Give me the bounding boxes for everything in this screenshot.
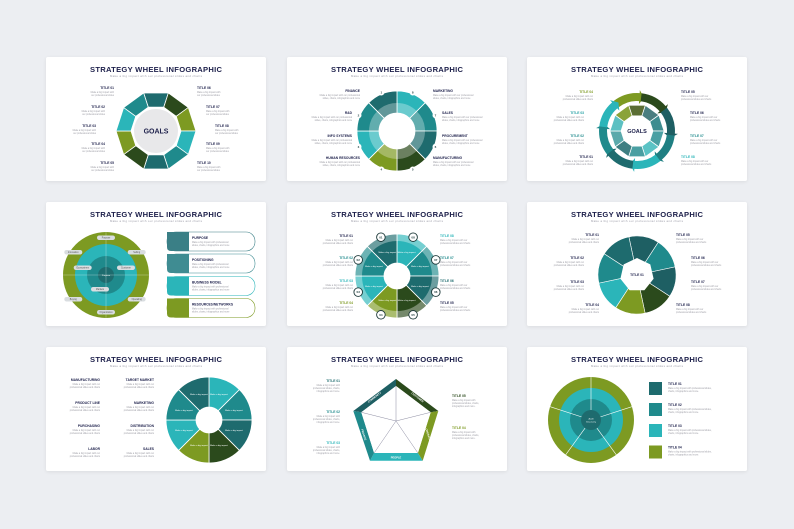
right labels: Make a big impact with <box>197 166 221 169</box>
left labels <box>313 379 341 455</box>
left labels: professional slides and charts <box>554 119 585 122</box>
right labels: professional slides and charts <box>440 287 471 290</box>
chart: concentric wheel <box>63 232 149 318</box>
slide 5: numbered wheel <box>287 202 507 327</box>
right labels: our professional slides <box>215 132 239 135</box>
left labels: our professional slides <box>82 113 106 116</box>
right labels <box>197 86 239 172</box>
chart: gear wheel: 4 <box>380 168 382 172</box>
list: titles: TITLE 02 <box>668 403 682 407</box>
chart: numbered wheel: 02 <box>357 258 360 262</box>
chart: numbered wheel: Make a big impact <box>411 285 429 288</box>
label columns: SALES <box>143 447 155 451</box>
left labels: professional slides and charts <box>569 311 600 314</box>
chart: shutter wheel <box>581 219 693 331</box>
list: titles: charts, infographics and more. <box>668 454 699 456</box>
label columns: professional slides and charts <box>70 386 101 389</box>
label columns: LABOR <box>88 447 101 451</box>
right labels: Make a big impact with our <box>440 284 468 287</box>
left labels: Make a big impact with our <box>566 160 593 163</box>
list: titles: charts, infographics and more. <box>668 432 699 435</box>
label columns: Make a big impact with our <box>127 383 154 386</box>
left labels: TITLE 04 <box>91 142 105 146</box>
chart: numbered wheel: 04 <box>379 313 383 317</box>
right labels: TITLE 05 <box>681 90 695 94</box>
left labels: professional slides and charts <box>323 287 354 290</box>
slide 8: pentagon <box>287 347 507 471</box>
heading: STRATEGY WHEEL INFOGRAPHIC <box>90 355 223 364</box>
right labels: professional slides and charts <box>440 242 471 245</box>
slide 7: business areas wheel <box>46 347 266 472</box>
chart: wheel: Make a big impact <box>175 409 193 412</box>
heading: STRATEGY WHEEL INFOGRAPHIC <box>571 210 704 219</box>
right labels: slides, charts, infographics and more <box>442 119 480 122</box>
right labels: TITLE 07 <box>691 280 705 284</box>
slide 3: goals arrow cycle: Make a big impact with our professional slides and charts <box>591 74 684 78</box>
right labels: Make a big impact with <box>206 147 230 150</box>
left labels: slides, charts, infographics and more <box>323 164 361 167</box>
left labels: TITLE 02 <box>326 410 340 414</box>
right labels: Make a big impact with <box>206 110 230 113</box>
heading: STRATEGY WHEEL INFOGRAPHIC <box>331 210 464 219</box>
right labels: our professional slides <box>206 150 230 153</box>
slide 6: shutter wheel: Make a big impact with our professional slides and charts <box>591 219 684 223</box>
left labels: Make a big impact with our <box>572 308 599 311</box>
slide 4: business model wheel: Make a big impact with our professional slides and charts <box>110 219 203 223</box>
right labels: professional slides and charts <box>690 119 721 122</box>
right labels: Make a big impact with our <box>440 306 468 309</box>
right labels <box>681 90 721 166</box>
left labels: professional slides and charts <box>323 264 354 267</box>
right labels: Make a big impact with our <box>676 308 704 311</box>
chart: numbered wheel: Make a big impact <box>398 299 416 302</box>
chart: numbered wheel: Make a big impact <box>365 285 383 288</box>
right labels: MARKETING <box>433 89 453 93</box>
left labels: professional slides and charts <box>323 242 354 245</box>
left labels: Make a big impact with our <box>326 239 353 242</box>
right labels: Make a big impact with <box>197 91 221 94</box>
list: titles: Make a big impact with professional slides, <box>668 387 712 390</box>
right labels: Make a big impact with our <box>440 239 468 242</box>
list: titles: Make a big impact with professional slides, <box>668 408 712 411</box>
list: purpose/positioning/business model/resources: BUSINESS MODEL <box>192 280 222 284</box>
left labels: professional slides, charts, <box>313 387 340 390</box>
right labels <box>433 89 483 167</box>
label columns: professional slides and charts <box>124 409 155 412</box>
left labels <box>554 233 600 314</box>
heading: STRATEGY WHEEL INFOGRAPHIC <box>90 210 223 219</box>
pentagon side labels: COMMUNITY <box>367 391 382 404</box>
right labels: professional slides and charts <box>676 241 707 244</box>
list: purpose/positioning/business model/resources: RESOURCES/NETWORKS <box>192 302 234 306</box>
heading: STRATEGY WHEEL INFOGRAPHIC <box>90 65 223 74</box>
right labels: TITLE 08 <box>215 124 229 128</box>
list: purpose/positioning/business model/resources: Make a big impact with professional <box>192 241 229 244</box>
chart: gear wheel: 2 <box>358 113 360 117</box>
chart: numbered wheel: 07 <box>434 258 438 262</box>
chart: gear wheel: 1 <box>380 91 382 95</box>
chart: numbered wheel: 08 <box>411 235 415 239</box>
left labels: professional slides, charts, <box>313 449 340 452</box>
left labels: Make a big impact with <box>91 91 115 94</box>
list: purpose/positioning/business model/resources: Make a big impact with professional <box>192 263 229 266</box>
chart: numbered wheel: Make a big impact <box>411 265 429 268</box>
slide 9: audit wheel: Make a big impact with our professional slides and charts <box>591 364 684 368</box>
list: purpose/positioning/business model/resources: slides, charts, infographics and more <box>192 310 230 314</box>
right labels: Make a big impact with our <box>691 261 719 264</box>
chart: concentric audit wheel: Audit <box>588 418 594 420</box>
label columns: professional slides and charts <box>124 432 155 435</box>
chart: numbered wheel <box>346 225 448 327</box>
left labels: our professional slides <box>91 169 115 172</box>
list: purpose/positioning/business model/resources: slides, charts, infographics and more <box>192 288 230 292</box>
right labels: Make a big impact with our <box>681 95 709 98</box>
right labels: TITLE 06 <box>440 279 454 283</box>
left labels: professional slides, charts, <box>313 418 340 421</box>
list: purpose/positioning/business model/resources <box>167 232 255 318</box>
left labels <box>73 86 115 172</box>
chart: concentric audit wheel <box>548 377 634 463</box>
heading: STRATEGY WHEEL INFOGRAPHIC <box>571 65 704 74</box>
slide 9: audit wheel <box>527 347 747 471</box>
chart: gear wheel: 8 <box>412 91 414 95</box>
left labels: infographics and more. <box>317 421 340 424</box>
right labels: professional slides, charts, <box>452 434 479 437</box>
list: titles: Make a big impact with professional slides, <box>668 429 712 432</box>
left labels: TITLE 02 <box>91 105 105 109</box>
right labels: TITLE 06 <box>197 86 211 90</box>
chart: decagon wheel <box>116 93 196 169</box>
left labels: Make a big impact with <box>317 415 341 418</box>
chart: numbered wheel: 03 <box>357 290 360 294</box>
left labels: slides, charts, infographics and more <box>315 119 353 122</box>
slide 5: numbered wheel: Make a big impact with our professional slides and charts <box>351 219 444 223</box>
heading: STRATEGY WHEEL INFOGRAPHIC <box>571 355 704 364</box>
label columns: professional slides and charts <box>70 432 101 435</box>
label columns: professional slides and charts <box>124 455 155 458</box>
left labels: Make a big impact with <box>91 166 115 169</box>
chart: wheel: Make a big impact <box>225 429 243 432</box>
chart: numbered wheel: Make a big impact <box>379 251 397 254</box>
right labels: our professional slides <box>197 94 221 97</box>
list: purpose/positioning/business model/resources: Make a big impact with professional <box>192 308 229 310</box>
label columns: Make a big impact with our <box>73 429 100 432</box>
label columns: PURCHASING <box>78 424 100 428</box>
right labels: MANUFACTURING <box>433 156 463 160</box>
chart: concentric wheel: Buying <box>70 299 78 301</box>
left labels: TITLE 04 <box>339 301 353 305</box>
label columns: Make a big impact with our <box>73 383 100 386</box>
right labels: Make a big impact with our <box>676 238 704 241</box>
chart: wheel: Make a big impact <box>190 393 208 396</box>
left labels: professional slides and charts <box>554 264 585 267</box>
left labels: TITLE 02 <box>339 256 353 260</box>
pentagon side labels: CUSTOMER <box>410 391 425 403</box>
slide 8: pentagon: Make a big impact with our professional slides and charts <box>351 364 444 368</box>
right labels: professional slides and charts <box>440 309 471 312</box>
right labels: Make a big impact with our <box>691 285 719 288</box>
right labels: TITLE 05 <box>440 301 454 305</box>
left labels: Make a big impact with our <box>557 261 584 264</box>
right labels <box>440 234 471 312</box>
list: purpose/positioning/business model/resources: POSITIONING <box>192 258 214 262</box>
right labels: TITLE 06 <box>691 256 705 260</box>
left labels: professional slides and charts <box>563 98 594 101</box>
left labels: our professional slides <box>82 150 106 153</box>
left labels: TITLE 02 <box>570 134 584 138</box>
label columns <box>70 378 155 458</box>
label columns: PRODUCT LINE <box>75 401 101 405</box>
chart: wheel: Make a big impact <box>225 409 243 412</box>
right labels: SALES <box>442 111 454 115</box>
right labels: professional slides and charts <box>676 311 707 314</box>
chart: numbered wheel: 06 <box>434 290 438 294</box>
left labels: professional slides and charts <box>554 288 585 291</box>
chart: pentagon <box>353 379 438 461</box>
label columns: TARGET MARKET <box>126 378 154 382</box>
right labels: Make a big impact with our professional <box>433 94 474 97</box>
list: purpose/positioning/business model/resources: slides, charts, infographics and more <box>192 244 230 247</box>
left labels: Make a big impact with our <box>326 284 353 287</box>
list: titles: charts, infographics and more. <box>668 390 699 393</box>
right labels: Make a big impact with our <box>690 139 718 142</box>
chart: gear wheel: 5 <box>412 168 414 172</box>
right labels: TITLE 08 <box>676 303 690 307</box>
right labels: slides, charts, infographics and more <box>442 142 480 145</box>
chart: wheel: Make a big impact <box>210 393 228 396</box>
right labels: TITLE 07 <box>690 134 704 138</box>
left labels: TITLE 01 <box>100 86 114 90</box>
left labels: Make a big impact with our professional <box>320 94 360 97</box>
left labels: Make a big impact with our <box>557 139 584 142</box>
chart: gear wheel: 3 <box>358 145 360 149</box>
right labels: Make a big impact with our professional <box>433 161 474 164</box>
right labels: TITLE 05 <box>452 394 466 398</box>
left labels: Make a big impact with our <box>326 306 353 309</box>
left labels: Make a big impact with <box>317 446 341 449</box>
chart: concentric wheel: Innovation <box>68 251 79 254</box>
chart: concentric audit wheel: Discovery <box>586 420 597 423</box>
right labels: TITLE 08 <box>440 234 454 238</box>
slide 4: business model wheel <box>46 202 266 326</box>
right labels: TITLE 09 <box>206 142 220 146</box>
chart: gear wheel <box>349 83 445 179</box>
chart: wheel <box>157 368 261 472</box>
left labels <box>554 90 594 166</box>
left labels: TITLE 04 <box>579 90 593 94</box>
chart: concentric wheel: Customer <box>121 267 131 270</box>
pentagon side labels <box>360 391 434 460</box>
list: purpose/positioning/business model/resources: Make a big impact with professional <box>192 286 229 288</box>
chart: wheel: Make a big impact <box>210 444 228 447</box>
slide 1: goals decagon wheel <box>46 57 266 181</box>
chart: shutter wheel: TITLE 01 <box>630 273 644 277</box>
label columns: Make a big impact with our <box>127 406 154 409</box>
chart: numbered wheel: 05 <box>411 313 415 317</box>
chart: wheel: Make a big impact <box>175 429 193 432</box>
left labels: professional slides and charts <box>569 241 600 244</box>
chart: concentric wheel: Markets <box>96 288 105 291</box>
left labels: Make a big impact with <box>317 384 341 387</box>
list: titles: Make a big impact with professional slides, <box>668 450 712 454</box>
right labels: Make a big impact with <box>215 129 239 132</box>
list: purpose/positioning/business model/resources: PURPOSE <box>192 236 209 240</box>
right labels: professional slides and charts <box>440 264 471 267</box>
left labels: slides, charts, infographics and more <box>323 97 361 100</box>
left labels: infographics and more. <box>317 452 340 455</box>
chart: gear wheel: 7 <box>435 113 437 117</box>
right labels: professional slides and charts <box>691 288 722 291</box>
left labels: TITLE 01 <box>579 155 593 159</box>
chart: concentric wheel: Organization <box>99 311 113 314</box>
chart: numbered wheel: Make a big impact <box>365 265 383 268</box>
label columns: Make a big impact with our <box>127 429 154 432</box>
left labels: TITLE 01 <box>585 233 599 237</box>
right labels: professional slides, charts, <box>452 402 479 405</box>
right labels: TITLE 10 <box>197 161 211 165</box>
slide 2: department gear wheel <box>287 57 507 181</box>
left labels: Make a big impact with our professional <box>312 139 352 142</box>
left labels: professional slides and charts <box>563 163 594 166</box>
label columns: professional slides and charts <box>124 386 155 389</box>
right labels: Make a big impact with <box>452 399 476 402</box>
chart: numbered wheel: Make a big impact <box>398 251 416 254</box>
left labels: Make a big impact with our <box>557 285 584 288</box>
right labels: PROCUREMENT <box>442 134 468 138</box>
chart: gear wheel: 6 <box>435 145 437 149</box>
list: titles: charts, infographics and more. <box>668 411 699 414</box>
left labels: Make a big impact with our <box>572 238 599 241</box>
left labels: FINANCE <box>345 89 361 93</box>
left labels: professional slides and charts <box>323 309 354 312</box>
list: titles: TITLE 04 <box>668 446 682 450</box>
slide 3: goals arrow cycle <box>527 57 747 181</box>
right labels: slides, charts, infographics and more <box>433 97 471 100</box>
right labels: Make a big impact with our professional <box>442 139 483 142</box>
left labels: TITLE 03 <box>326 441 340 445</box>
slide 7: business areas wheel: Make a big impact with our professional slides and charts <box>110 364 203 368</box>
right labels: Make a big impact with our professional <box>442 116 483 119</box>
list: titles: TITLE 03 <box>668 424 682 428</box>
chart: decagon wheel: GOALS <box>144 128 169 136</box>
right labels: Make a big impact with our <box>440 261 468 264</box>
chart: concentric wheel: Selling <box>133 252 141 254</box>
slide 2: department gear wheel: Make a big impact with our professional slides and charts <box>351 74 444 78</box>
left labels: Make a big impact with <box>82 147 106 150</box>
right labels: TITLE 07 <box>440 256 454 260</box>
right labels: TITLE 05 <box>676 233 690 237</box>
chart: numbered wheel: 01 <box>379 235 383 239</box>
label columns: Make a big impact with our <box>73 406 100 409</box>
chart: wheel: Make a big impact <box>190 444 208 447</box>
left labels: TITLE 03 <box>339 279 353 283</box>
right labels <box>676 233 722 314</box>
right labels: our professional slides <box>197 169 221 172</box>
label columns: professional slides and charts <box>70 455 101 458</box>
left labels: slides, charts, infographics and more <box>315 142 353 145</box>
right labels: professional slides and charts <box>690 142 721 145</box>
right labels: Make a big impact with our <box>690 116 718 119</box>
label columns: MARKETING <box>134 401 154 405</box>
chart: concentric wheel: Ecosystems <box>77 267 90 270</box>
chart: concentric wheel: Operating <box>132 298 142 301</box>
left labels <box>312 89 361 167</box>
left labels: Make a big impact with <box>82 110 106 113</box>
slide 6: shutter wheel <box>527 202 747 331</box>
pentagon side labels: OPERATIONS <box>424 428 434 446</box>
label columns: Make a big impact with our <box>127 452 154 455</box>
list: purpose/positioning/business model/resources: slides, charts, infographics and more <box>192 266 230 269</box>
heading: STRATEGY WHEEL INFOGRAPHIC <box>331 355 464 364</box>
chart: concentric wheel: Purpose <box>102 274 111 277</box>
right labels: Make a big impact with <box>452 431 476 434</box>
right labels: professional slides and charts <box>691 264 722 267</box>
left labels: Make a big impact with our <box>557 116 584 119</box>
right labels: infographics and more. <box>452 437 476 440</box>
right labels: TITLE 04 <box>452 426 466 430</box>
left labels: TITLE 01 <box>326 379 340 383</box>
left labels: TITLE 04 <box>585 303 599 307</box>
left labels: Make a big impact with our <box>326 261 353 264</box>
label columns: Make a big impact with our <box>73 452 100 455</box>
left labels: TITLE 01 <box>339 234 353 238</box>
label columns: MANUFACTURING <box>71 378 100 382</box>
label columns: professional slides and charts <box>70 409 101 412</box>
left labels: infographics and more. <box>317 390 340 393</box>
left labels: Make a big impact with <box>73 129 97 132</box>
left labels <box>323 234 354 312</box>
right labels: TITLE 08 <box>681 155 695 159</box>
list: titles: TITLE 01 <box>668 382 682 386</box>
right labels: infographics and more. <box>452 405 476 408</box>
pentagon side labels: FINANCE <box>360 429 368 441</box>
chart: concentric wheel: Purpose <box>102 237 111 240</box>
left labels: Make a big impact with our professional <box>312 116 352 119</box>
slide 1: goals decagon wheel: Make a big impact with our professional slides and charts <box>110 74 203 78</box>
right labels: Make a big impact with our <box>681 160 709 163</box>
left labels: TITLE 05 <box>100 161 114 165</box>
right labels: slides, charts, infographics and more <box>433 164 471 167</box>
right labels: professional slides and charts <box>681 163 712 166</box>
pentagon side labels: PEOPLE <box>391 456 402 460</box>
left labels: TITLE 03 <box>570 280 584 284</box>
left labels: R&D <box>345 111 353 115</box>
left labels: TITLE 03 <box>82 124 96 128</box>
left labels: our professional slides <box>91 94 115 97</box>
chart: arrow cycle <box>589 83 685 179</box>
left labels: INFO SYSTEMS <box>327 134 353 138</box>
heading: STRATEGY WHEEL INFOGRAPHIC <box>331 65 464 74</box>
right labels: our professional slides <box>206 113 230 116</box>
left labels: our professional slides <box>73 132 97 135</box>
left labels: professional slides and charts <box>554 142 585 145</box>
left labels: Make a big impact with our <box>566 95 593 98</box>
label columns: DISTRIBUTION <box>131 424 155 428</box>
left labels: TITLE 02 <box>570 256 584 260</box>
left labels: TITLE 03 <box>570 111 584 115</box>
right labels: professional slides and charts <box>681 98 712 101</box>
right labels <box>452 394 479 440</box>
chart: arrow cycle: GOALS <box>627 129 647 135</box>
left labels: HUMAN RESOURCES <box>326 156 361 160</box>
chart: numbered wheel: Make a big impact <box>379 299 397 302</box>
left labels: Make a big impact with our professional <box>320 161 360 164</box>
list: titles <box>649 382 712 458</box>
right labels: TITLE 07 <box>206 105 220 109</box>
right labels: TITLE 06 <box>690 111 704 115</box>
